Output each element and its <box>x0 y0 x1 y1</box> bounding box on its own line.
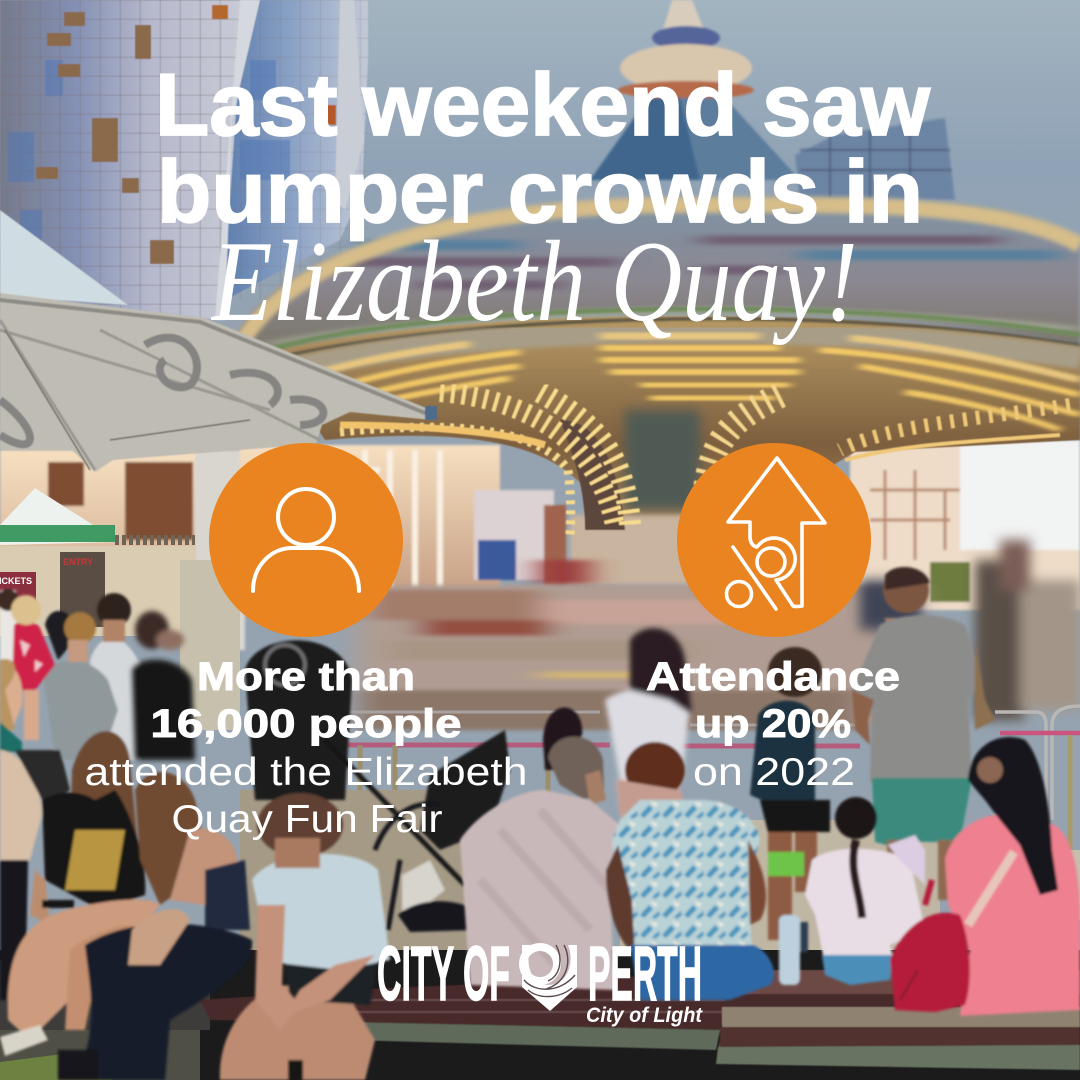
carousel spire and roof <box>590 0 800 180</box>
right background tower <box>795 118 955 200</box>
dark haired head behind <box>543 708 582 770</box>
rows of yellow lights <box>300 336 1080 430</box>
infographic canvas: PERTH <box>588 931 702 1017</box>
fair stall <box>0 488 240 730</box>
script subtitle: Elizabeth Quay! <box>210 218 858 346</box>
blurred woman in white <box>605 628 692 820</box>
crowd: left group <box>0 589 510 1080</box>
ground and rear floor <box>0 790 1080 1080</box>
water bottle <box>779 915 800 985</box>
bench <box>200 970 1080 1070</box>
barrier railing <box>340 706 1080 900</box>
child in red dress <box>11 595 55 740</box>
rotating drum band <box>232 198 1080 372</box>
far-left seated woman <box>0 659 42 1000</box>
red bag <box>890 880 970 1012</box>
icon: up arrow with percent in orange circle <box>677 443 871 637</box>
blurred person in black <box>132 611 195 760</box>
woman in floral top <box>606 742 774 1000</box>
logo: City of Perth: CITY OF <box>377 931 510 1017</box>
woman in pink dress <box>945 737 1080 1016</box>
stat text: attendance growth: up 20% <box>695 702 851 746</box>
title: Last weekend saw <box>155 55 931 154</box>
stat text: attendance count: attended the Elizabeth <box>84 751 528 794</box>
stat text: attendance count <box>84 655 528 841</box>
light arches <box>340 392 1070 535</box>
stroller <box>325 730 510 932</box>
icon: person in orange circle <box>209 443 403 637</box>
title <box>155 55 931 241</box>
stat text: attendance count: More than <box>197 655 415 699</box>
crowd: right group <box>460 567 1080 1016</box>
twin glass towers <box>0 0 368 320</box>
man in black printed shirt <box>245 640 352 800</box>
stat text: attendance growth: Attendance <box>646 655 900 699</box>
logo: City of Perth: City of Light <box>586 1004 703 1027</box>
bright buildings beneath carousel <box>0 440 1080 650</box>
man in grey tee <box>852 567 995 900</box>
girl with long hair and navy top <box>58 772 252 1080</box>
stroller handle <box>15 750 70 805</box>
awning <box>0 210 437 472</box>
stat text: attendance count: Quay Fun Fair <box>172 798 443 841</box>
child with backpack <box>750 647 830 952</box>
stat text: attendance count: 16,000 people <box>150 702 462 746</box>
fair stall: ENTRY <box>63 557 93 567</box>
right side blurred figures <box>860 540 1080 720</box>
carousel underside with lights <box>265 316 1080 585</box>
man behind in white shirt <box>90 593 140 760</box>
girl in black band tee <box>0 731 160 1056</box>
girl with braid <box>805 797 925 985</box>
boy in white tee <box>220 793 390 1080</box>
logo shield emblem <box>522 945 577 1011</box>
title: bumper crowds in <box>157 142 923 241</box>
stat text: attendance growth: on 2022 <box>693 751 855 794</box>
blurred riders in motion <box>355 560 915 730</box>
man in patterned shirt <box>460 736 620 990</box>
woman in grey tee <box>43 612 118 760</box>
stat text: attendance growth <box>646 655 900 794</box>
